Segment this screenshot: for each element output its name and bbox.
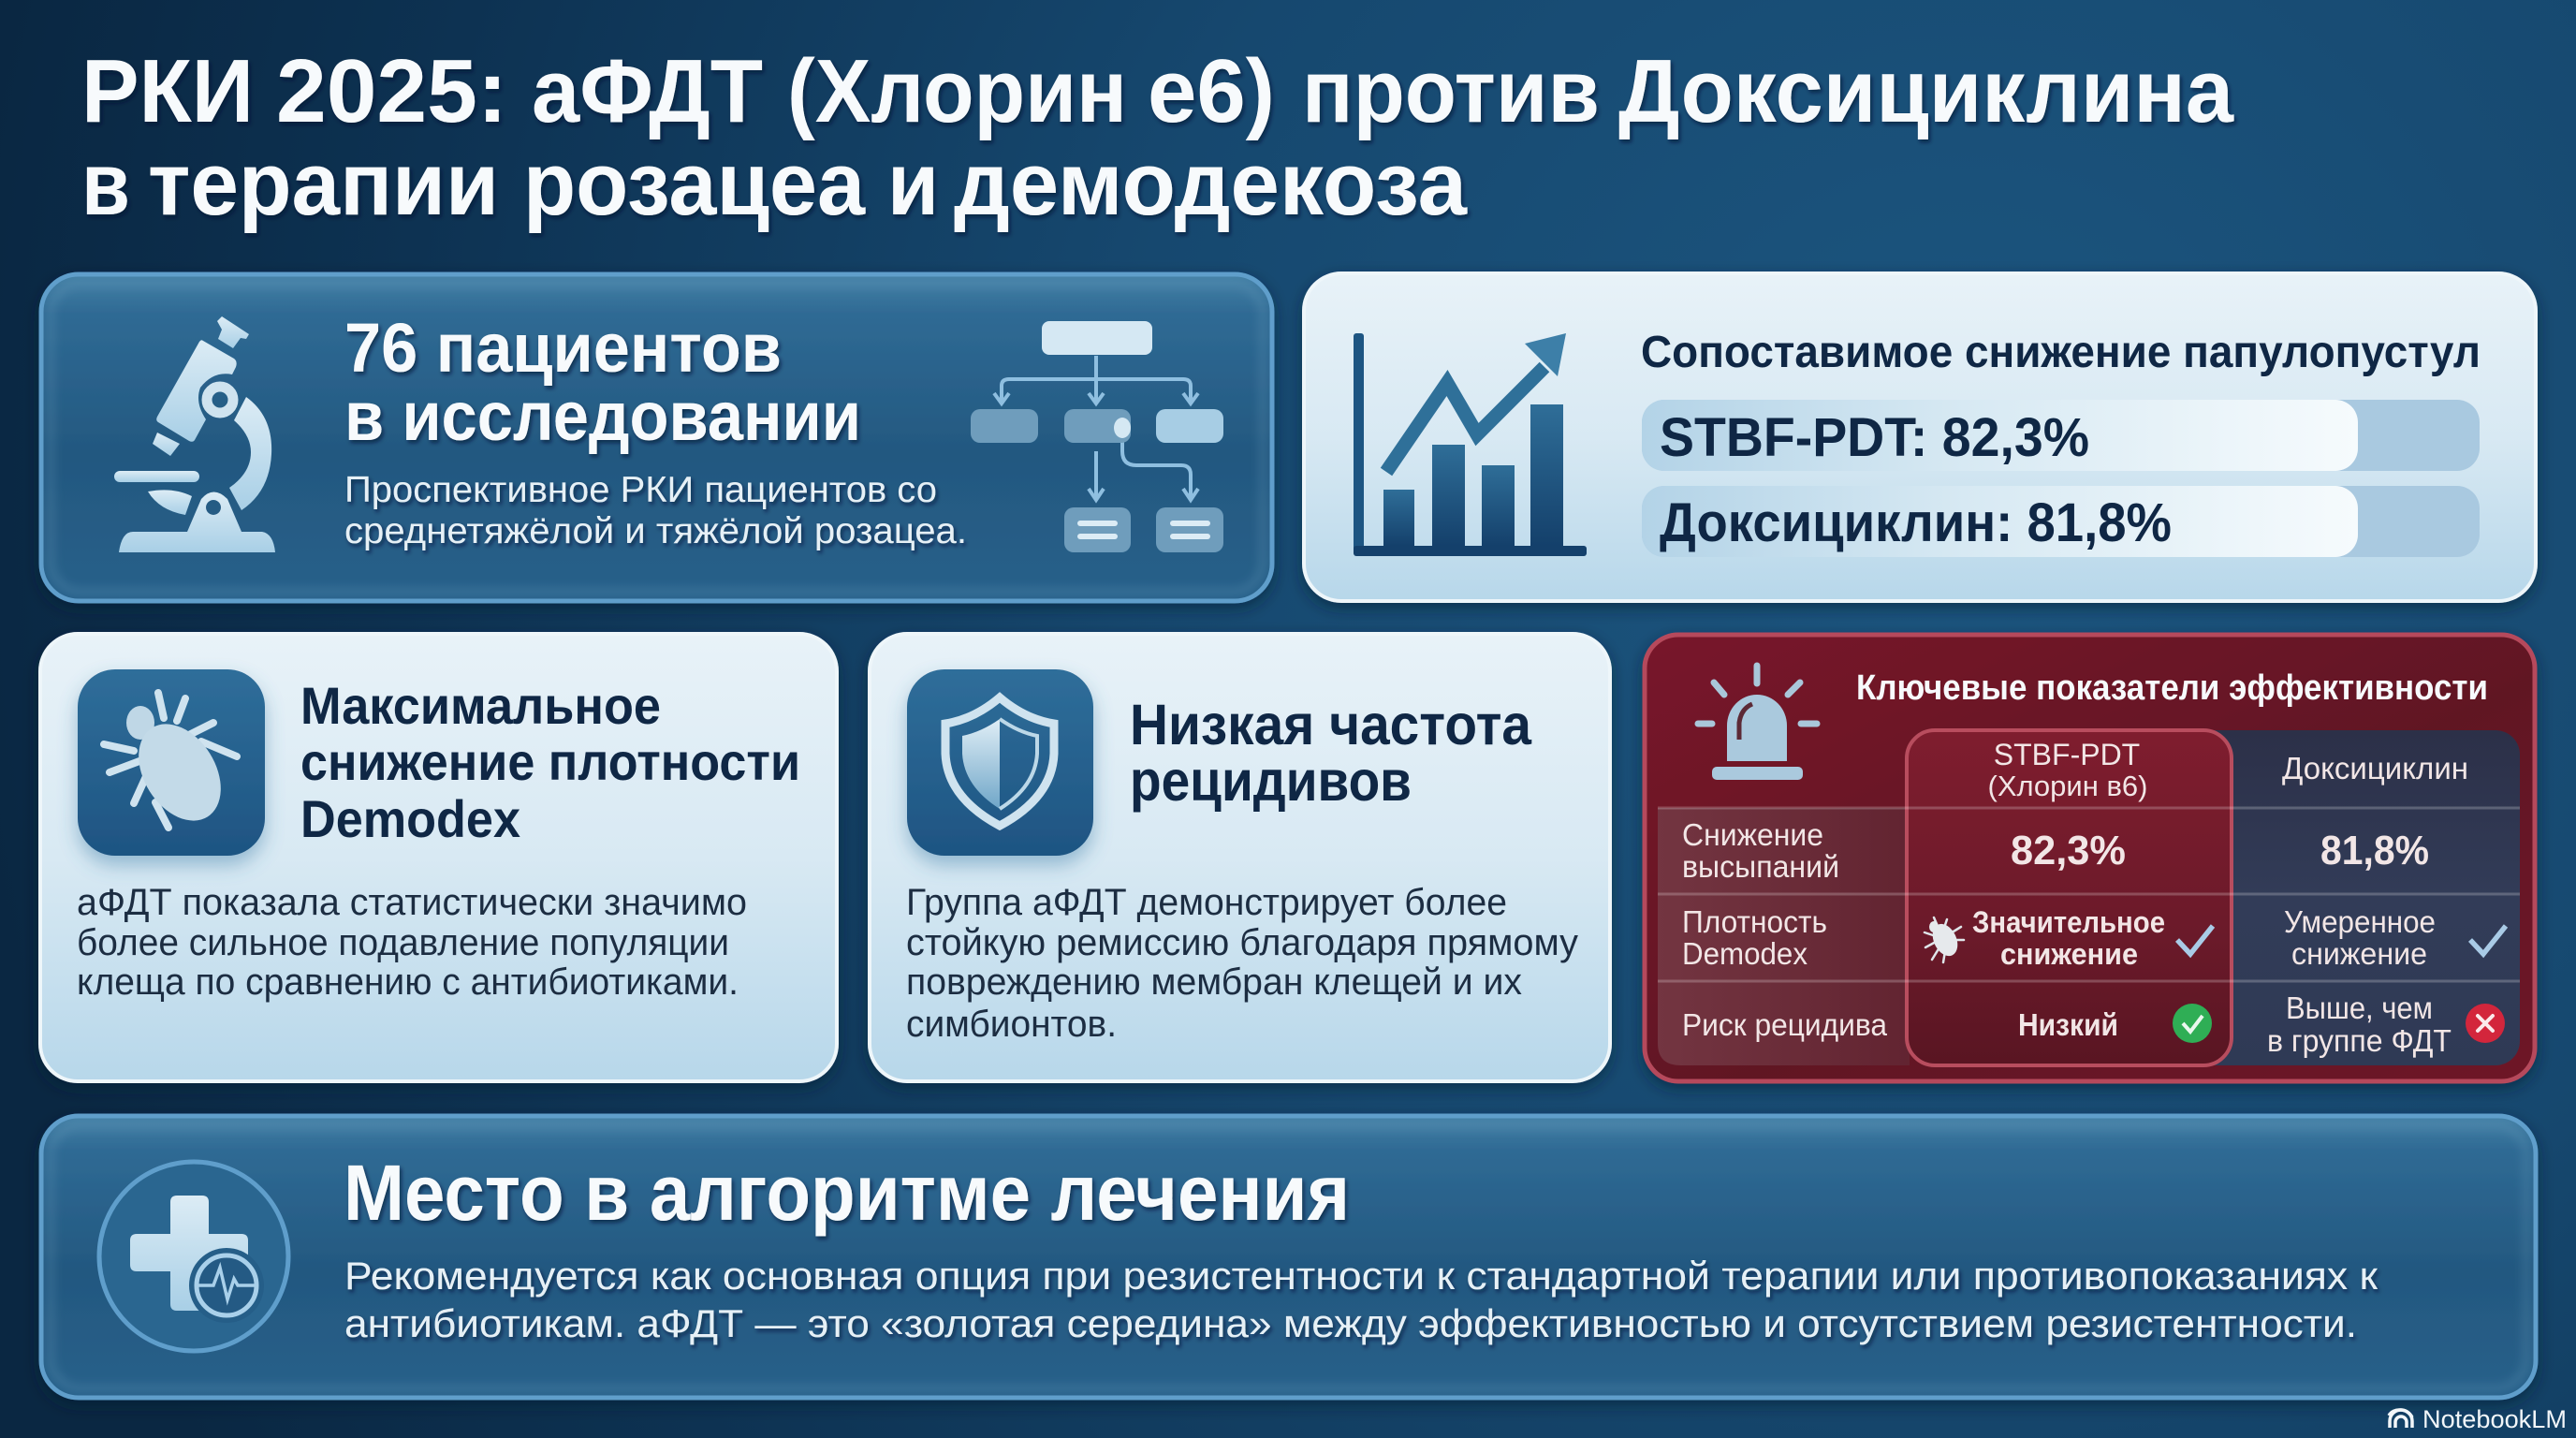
row: rash reduction: 82,3% <box>2011 828 2126 873</box>
icon: green check <box>2173 1004 2212 1043</box>
title: Доксициклина <box>1618 41 2234 141</box>
title: аФДТ <box>532 41 763 141</box>
icon: rising bar chart <box>1354 333 1587 556</box>
relapse description: повреждению мембран клещей и их <box>906 961 1522 1003</box>
row: Demodex density: Demodex <box>1682 936 1808 971</box>
algorithm description: Рекомендуется как основная опция при резистентности к стандартной терапии или противопоказаниях к <box>344 1254 2378 1298</box>
bar: doxycycline 81.8% <box>1642 486 2480 557</box>
title <box>81 41 2234 234</box>
column header: STBF-PDT: STBF-PDT <box>1994 738 2140 771</box>
icon: microscope <box>114 316 275 552</box>
title: е6) <box>1148 41 1275 141</box>
panel: place in treatment algorithm <box>41 1116 2536 1398</box>
relapse description <box>906 882 1578 1045</box>
Demodex heading: Demodex <box>300 789 520 848</box>
algorithm heading: Место в алгоритме лечения <box>344 1149 1350 1237</box>
panel: low relapse rate <box>870 634 1610 1081</box>
Demodex description: аФДТ показала статистически значимо <box>77 882 747 923</box>
icon: mite <box>78 669 265 856</box>
icon: check <box>2177 926 2213 954</box>
row: Demodex density: снижение <box>2291 936 2427 971</box>
title: (Хлорин <box>787 41 1127 141</box>
icon: red cross <box>2466 1004 2505 1043</box>
row: Demodex density: снижение <box>2000 937 2138 971</box>
row: relapse risk: Выше, чем <box>2286 990 2433 1025</box>
row: Demodex density <box>1682 904 2506 971</box>
icon: study flowchart <box>971 321 1223 552</box>
title: терапии <box>148 134 499 234</box>
title: и <box>887 134 939 234</box>
title: демодекоза <box>954 134 1468 234</box>
row: Demodex density: Плотность <box>1682 904 1827 939</box>
bar: doxycycline 81.8%: Доксициклин: 81,8% <box>1660 492 2172 553</box>
column header: doxycycline: Доксициклин <box>2282 751 2468 785</box>
title: в <box>81 134 130 234</box>
bar: STBF-PDT 82.3% <box>1642 400 2480 471</box>
panel: 76 patients <box>41 274 1272 601</box>
Demodex description <box>77 882 747 1003</box>
NotebookLM watermark: NotebookLM <box>2422 1405 2567 1433</box>
panel: Demodex density <box>40 634 837 1081</box>
stat heading <box>344 309 861 455</box>
row: rash reduction: 81,8% <box>2320 828 2429 873</box>
comparison table <box>1658 730 2520 1065</box>
row: Demodex density: Умеренное <box>2284 904 2436 939</box>
row: relapse risk: в группе ФДТ <box>2267 1023 2452 1058</box>
algorithm description <box>344 1254 2378 1345</box>
title: против <box>1302 41 1600 141</box>
study description <box>344 470 967 551</box>
relapse heading: рецидивов <box>1130 749 1412 813</box>
algorithm description: антибиотикам. аФДТ — это «золотая середина» между эффективностью и отсутствием резистентности. <box>344 1301 2357 1345</box>
row: rash reduction: высыпаний <box>1682 849 1839 884</box>
row: Demodex density: Значительное <box>1972 905 2165 939</box>
relapse heading: Низкая частота <box>1130 693 1532 756</box>
icon: small mite <box>1925 917 1964 962</box>
row: relapse risk: Риск рецидива <box>1682 1007 1888 1042</box>
title: РКИ <box>81 41 254 141</box>
Demodex heading <box>300 676 800 848</box>
Demodex description: клеща по сравнению с антибиотиками. <box>77 961 739 1003</box>
title: 2025: <box>276 41 507 141</box>
relapse description: Группа аФДТ демонстрирует более <box>906 882 1507 923</box>
relapse description: стойкую ремиссию благодаря прямому <box>906 922 1578 963</box>
row: rash reduction <box>1682 817 2429 884</box>
bar: STBF-PDT 82.3%: STBF-PDT: 82,3% <box>1660 407 2089 468</box>
row: rash reduction: Снижение <box>1682 817 1823 852</box>
stat heading: в исследовании <box>344 377 861 455</box>
icon: alarm beacon <box>1698 666 1817 780</box>
row: relapse risk: Низкий <box>2018 1007 2118 1042</box>
Demodex description: более сильное подавление популяции <box>77 922 729 963</box>
comparison heading: Сопоставимое снижение папулопустул <box>1641 328 2481 377</box>
panel: key efficacy table <box>1645 635 2535 1081</box>
row: relapse risk <box>1682 990 2505 1058</box>
Demodex heading: снижение плотности <box>300 732 800 791</box>
study description: Проспективное РКИ пациентов со <box>344 470 937 510</box>
stat heading: 76 пациентов <box>344 309 782 387</box>
Demodex heading: Максимальное <box>300 676 661 735</box>
relapse description: симбионтов. <box>906 1004 1117 1045</box>
relapse heading <box>1130 693 1532 813</box>
icon: shield <box>907 669 1093 856</box>
panel: papulopustule reduction <box>1304 273 2536 601</box>
column header: STBF-PDT: (Хлорин в6) <box>1988 770 2147 802</box>
study description: среднетяжёлой и тяжёлой розацеа. <box>344 511 967 551</box>
icon: medical cross with pulse <box>99 1162 288 1351</box>
table heading: Ключевые показатели эффективности <box>1856 668 2488 708</box>
title: розацеа <box>523 134 866 234</box>
column header: STBF-PDT <box>1988 738 2147 802</box>
icon: check <box>2470 926 2506 954</box>
